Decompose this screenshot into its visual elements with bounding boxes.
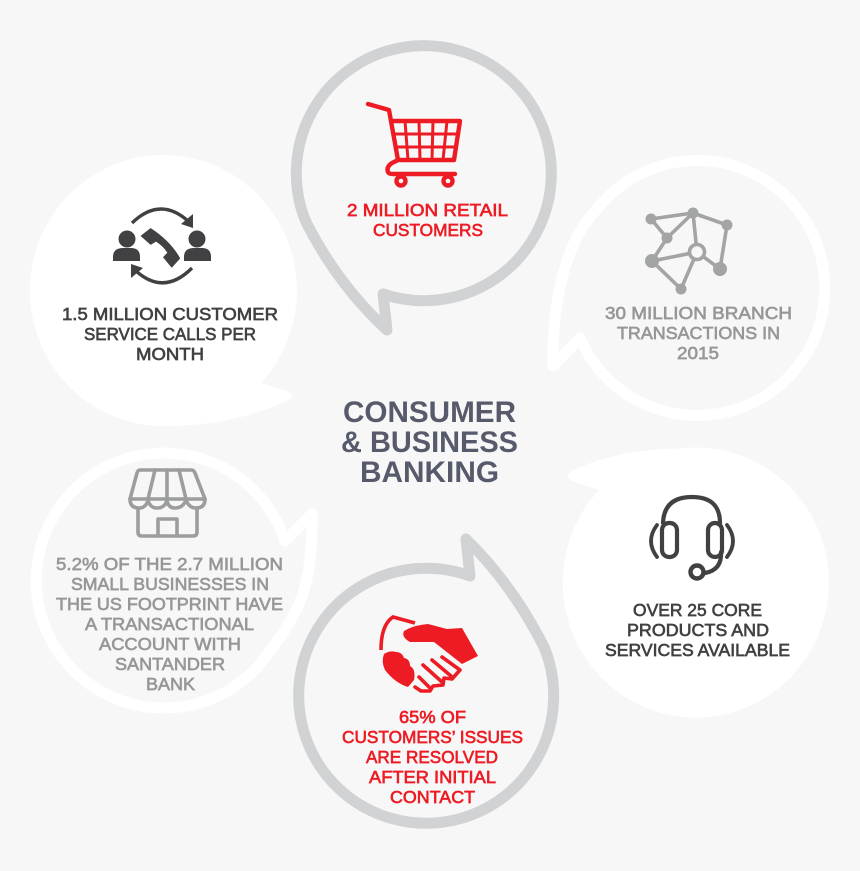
stat text: 30 million branch transactions: 30 MILLION BRANCH [605, 303, 792, 323]
stat text: 2 million retail customers [347, 200, 508, 240]
stat text: over 25 core products: PRODUCTS AND [627, 620, 769, 640]
speech bubble: white filled left [30, 155, 297, 426]
speech bubble: white filled right [563, 448, 829, 718]
stat text: over 25 core products [605, 600, 790, 660]
icon: shopping cart [368, 104, 460, 186]
stat text: 5.2 percent of small businesses [56, 554, 283, 694]
panel: core products [563, 448, 829, 718]
stat text: 5.2 percent of small businesses: THE US FOOTPRINT HAVE [56, 594, 283, 614]
title [341, 396, 518, 489]
stat text: 65 percent resolved [342, 707, 523, 807]
stat text: 5.2 percent of small businesses: A TRANSACTIONAL [85, 614, 254, 634]
stat text: 1.5 million calls: SERVICE CALLS PER [84, 324, 256, 344]
speech bubble: grey outline top [296, 46, 551, 330]
stat text: 30 million branch transactions [605, 303, 792, 363]
icon: call between two people [113, 209, 211, 283]
stat text: 5.2 percent of small businesses: BANK [146, 674, 195, 694]
panel: customer service calls [30, 155, 297, 426]
speech bubble: grey outline bottom [299, 539, 554, 823]
icon: handshake [381, 617, 478, 691]
stat text: over 25 core products: SERVICES AVAILABLE [605, 640, 790, 660]
icon: storefront [130, 470, 205, 536]
stat text: 65 percent resolved: 65% OF [399, 707, 466, 727]
stat text: 65 percent resolved: CONTACT [390, 787, 475, 807]
title: CONSUMER [343, 396, 516, 429]
icon: headset [651, 497, 733, 578]
title: BANKING [360, 456, 499, 489]
stat text: 5.2 percent of small businesses: 5.2% OF THE 2.7 MILLION [56, 554, 283, 574]
stat text: 65 percent resolved: ARE RESOLVED [366, 747, 498, 767]
stat text: over 25 core products: OVER 25 CORE [633, 600, 762, 620]
stat text: 1.5 million calls: MONTH [136, 344, 204, 364]
stat text: 30 million branch transactions: TRANSACTIONS IN [617, 323, 780, 343]
stat text: 2 million retail customers: CUSTOMERS [373, 220, 483, 240]
stat text: 2 million retail customers: 2 MILLION RETAIL [347, 200, 508, 220]
icon: network [645, 208, 732, 294]
stat text: 5.2 percent of small businesses: SMALL BUSINESSES IN [71, 574, 269, 594]
stat text: 30 million branch transactions: 2015 [677, 343, 719, 363]
stat text: 1.5 million calls: 1.5 MILLION CUSTOMER [62, 304, 278, 324]
panel: retail customers [296, 46, 551, 330]
stat text: 5.2 percent of small businesses: ACCOUNT WITH [99, 634, 241, 654]
panel: small businesses [36, 453, 312, 708]
stat text: 65 percent resolved: CUSTOMERS’ ISSUES [342, 727, 523, 747]
panel: issues resolved [299, 539, 554, 823]
stat text: 65 percent resolved: AFTER INITIAL [369, 767, 496, 787]
panel: branch transactions [553, 160, 825, 415]
stat text: 1.5 million calls [62, 304, 278, 364]
speech bubble: white outline right [553, 160, 825, 415]
stat text: 5.2 percent of small businesses: SANTANDER [115, 654, 225, 674]
title: & BUSINESS [341, 426, 518, 459]
speech bubble: white outline lower left [36, 453, 312, 708]
